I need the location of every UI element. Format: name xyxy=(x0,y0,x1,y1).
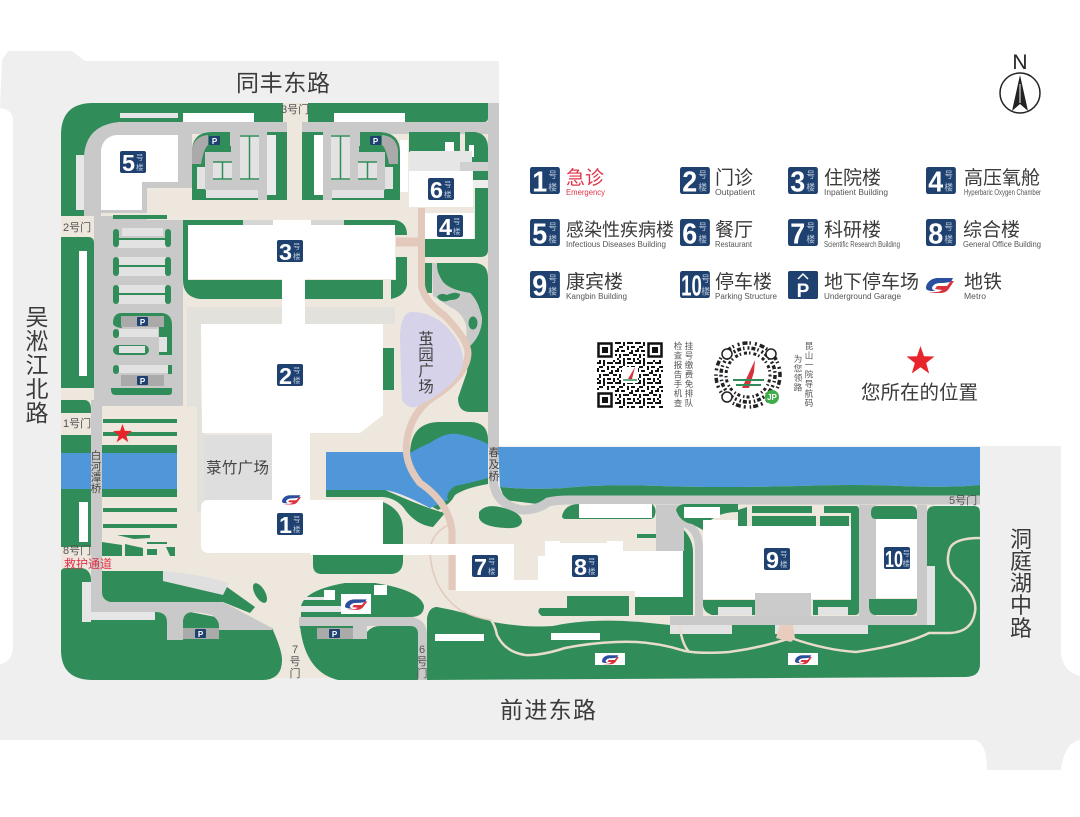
QR caption: 挂号缴费免排队 / 检查报告手机查: 排 xyxy=(685,388,694,398)
building tag 3 xyxy=(277,239,303,265)
legend item 2: 楼 xyxy=(698,181,707,192)
building tag 8: 楼 xyxy=(588,566,596,576)
road name: 洞庭湖中路: 路 xyxy=(1010,616,1032,641)
ambulance route label: 救护通道 xyxy=(64,556,112,571)
legend item 6: 餐厅 xyxy=(715,219,753,241)
legend item 3 xyxy=(788,166,888,198)
mini-program caption: 昆山一院导航码 / 为您领路: 为 xyxy=(794,354,802,364)
green beside emergency building xyxy=(313,348,403,574)
bridge label: 春及桥: 桥 xyxy=(488,470,500,483)
legend item 7: Scientific Research Building xyxy=(824,240,900,249)
mini-program caption: 昆山一院导航码 / 为您领路 xyxy=(794,341,814,408)
building tag 6: 楼 xyxy=(444,189,452,199)
parking tags on the map: P xyxy=(212,137,218,146)
green beside Crescent garden xyxy=(425,263,488,412)
campus base xyxy=(61,103,935,678)
north-east garden xyxy=(400,132,488,257)
legend item 4: 号 xyxy=(944,170,953,180)
legend item 8: 综合楼 xyxy=(963,219,1020,241)
bridge label: 白河潭桥: 潭 xyxy=(91,472,101,484)
building tag 1: 1 xyxy=(279,512,292,538)
parking plaza of general building xyxy=(755,593,811,616)
QR caption: 挂号缴费免排队 / 检查报告手机查: 机 xyxy=(674,388,683,398)
legend item underground garage: 地下停车场 xyxy=(824,271,919,293)
QR caption: 挂号缴费免排队 / 检查报告手机查: 检 xyxy=(674,341,683,351)
mini-program code: JP xyxy=(767,393,778,402)
building tag 9: 楼 xyxy=(780,559,788,569)
legend item 6: 号 xyxy=(698,222,707,232)
legend item metro xyxy=(926,271,1002,301)
south-centre green and access road xyxy=(299,583,427,680)
building tag 1: 号 xyxy=(293,515,300,524)
legend item 1: 号 xyxy=(548,170,557,180)
legend item 8 xyxy=(926,218,1041,250)
buildings xyxy=(101,135,917,599)
building tag 3: 3 xyxy=(279,239,292,265)
legend item 4: Hyperbaric Oxygen Chamber xyxy=(964,188,1041,197)
legend item 9 xyxy=(530,270,627,302)
legend item 6 xyxy=(680,218,753,250)
plaza: 菉竹广场 xyxy=(204,435,272,500)
legend item 6: Restaurant xyxy=(715,240,753,249)
legend item 5 xyxy=(530,218,674,250)
gate labels: 7 xyxy=(292,644,298,656)
north arrow xyxy=(1000,51,1040,113)
building tag 3: 楼 xyxy=(293,251,301,261)
legend item 3: 号 xyxy=(806,170,815,180)
salmon footpath xyxy=(396,208,491,620)
QR caption: 挂号缴费免排队 / 检查报告手机查: 费 xyxy=(685,370,694,380)
gate labels: 1号门 xyxy=(63,416,91,430)
legend item 2: 号 xyxy=(698,170,707,180)
legend item 1: 急诊 xyxy=(566,167,604,189)
bridge label: 白河潭桥: 桥 xyxy=(91,483,102,495)
building tag 4: 号 xyxy=(453,217,460,226)
south-west green and access road xyxy=(61,565,282,680)
QR caption: 挂号缴费免排队 / 检查报告手机查: 查 xyxy=(674,350,683,360)
QR caption: 挂号缴费免排队 / 检查报告手机查: 报 xyxy=(674,360,683,370)
mini-program caption: 昆山一院导航码 / 为您领路: 院 xyxy=(805,370,814,380)
gate labels: 门 xyxy=(416,666,428,680)
light lanes and white strips xyxy=(76,113,405,542)
legend item 4: 楼 xyxy=(944,181,953,192)
east road network xyxy=(479,445,980,625)
road name: 洞庭湖中路: 洞 xyxy=(1010,527,1032,552)
building tag 5: 5 xyxy=(122,150,135,176)
gate labels: 6 xyxy=(419,644,425,656)
plaza: 茧园广场: 园 xyxy=(418,347,434,364)
legend item 3: 3 xyxy=(790,166,805,198)
bridge label: 春及桥: 及 xyxy=(488,459,500,471)
legend item 5: 感染性疾病楼 xyxy=(566,220,674,240)
building tag 2 xyxy=(277,363,303,389)
legend item 1: 楼 xyxy=(548,181,557,192)
you-are-here legend: 您所在的位置 xyxy=(861,382,978,404)
building tag 2: 2 xyxy=(279,363,292,389)
building tag 4: 楼 xyxy=(453,226,461,236)
green: north and west edge xyxy=(61,103,488,547)
plaza: 菉竹广场: 菉竹广场 xyxy=(206,459,269,477)
building tag 8 xyxy=(572,554,598,580)
building tag 5 xyxy=(120,150,146,176)
legend item 9: Kangbin Building xyxy=(566,292,627,301)
QR caption: 挂号缴费免排队 / 检查报告手机查: 号 xyxy=(685,350,693,360)
legend item 5: 楼 xyxy=(548,233,557,244)
bridge label: 白河潭桥: 河 xyxy=(91,461,102,473)
north arrow: N xyxy=(1012,51,1028,74)
metro sign south centre xyxy=(341,594,371,614)
metro sign south belt right xyxy=(788,653,818,665)
metro sign south belt left xyxy=(595,653,625,665)
east light parking lots xyxy=(718,607,848,615)
gate labels: 号 xyxy=(290,655,300,668)
legend item 7: 科研楼 xyxy=(824,219,881,241)
legend item 5: 5 xyxy=(532,218,547,250)
legend item 6: 6 xyxy=(682,218,697,250)
river and pond xyxy=(61,422,980,527)
plaza: 茧园广场 xyxy=(400,312,463,407)
beige promenade xyxy=(147,103,420,409)
building tag 6: 6 xyxy=(430,177,443,203)
road name: 吴淞江北路: 路 xyxy=(26,400,48,426)
parking cluster north-west xyxy=(192,132,287,200)
legend item 3: Inpatient Building xyxy=(824,188,888,197)
you-are-here star on map xyxy=(113,424,132,442)
legend item 2 xyxy=(680,166,756,198)
metro sign at building 1 xyxy=(282,495,301,505)
legend item 6: 楼 xyxy=(698,233,707,244)
legend item 4: 4 xyxy=(928,166,944,198)
QR caption: 挂号缴费免排队 / 检查报告手机查: 缴 xyxy=(685,360,694,370)
legend item 4 xyxy=(926,166,1041,198)
legend item 10: 楼 xyxy=(701,285,710,296)
QR caption: 挂号缴费免排队 / 检查报告手机查: 队 xyxy=(685,398,694,408)
mini-program code xyxy=(716,343,780,407)
road name: 洞庭湖中路: 湖 xyxy=(1010,571,1032,596)
building tag 7 xyxy=(472,554,498,580)
QR caption: 挂号缴费免排队 / 检查报告手机查: 免 xyxy=(685,379,694,389)
legend item 8: General Office Building xyxy=(963,240,1041,249)
building tag 10: 10 xyxy=(885,546,903,572)
mini-program caption: 昆山一院导航码 / 为您领路: 航 xyxy=(805,388,814,398)
mini-program caption: 昆山一院导航码 / 为您领路: 昆 xyxy=(805,341,814,351)
legend item 9: 楼 xyxy=(548,285,557,296)
mini-program caption: 昆山一院导航码 / 为您领路: 领 xyxy=(794,373,803,383)
legend item metro: 地铁 xyxy=(964,271,1002,293)
mini-program caption: 昆山一院导航码 / 为您领路: 码 xyxy=(805,398,813,408)
you-are-here legend xyxy=(861,346,978,404)
road name: 洞庭湖中路: 庭 xyxy=(1010,549,1032,574)
building tag 6: 号 xyxy=(444,180,452,189)
building tag 5: 号 xyxy=(136,153,144,162)
legend item 7: 号 xyxy=(806,222,815,232)
legend item 2: 门诊 xyxy=(715,167,753,189)
gate labels xyxy=(63,102,977,680)
legend item 9: 9 xyxy=(532,270,547,302)
legend item 2: 2 xyxy=(682,166,697,198)
legend item 8: 楼 xyxy=(944,233,953,244)
mini-program caption: 昆山一院导航码 / 为您领路: 山 xyxy=(805,350,813,360)
road name: 同丰东路: 同丰东路 xyxy=(236,70,330,96)
building tag 4 xyxy=(437,214,463,240)
legend item 10: 停车楼 xyxy=(715,271,772,293)
parking tags on the map: P xyxy=(198,630,204,639)
road name: 吴淞江北路: 江 xyxy=(26,352,48,378)
legend item 3: 住院楼 xyxy=(824,167,881,189)
building tag 7: 7 xyxy=(474,554,487,580)
plaza: 茧园广场: 茧 xyxy=(418,330,434,348)
parking tags on the map: P xyxy=(332,630,338,639)
mini-program caption: 昆山一院导航码 / 为您领路: 一 xyxy=(805,360,814,370)
QR caption: 挂号缴费免排队 / 检查报告手机查 xyxy=(674,341,694,408)
legend item 3: 楼 xyxy=(806,181,815,192)
gate labels: 3号门 xyxy=(281,102,309,116)
bridge label: 春及桥: 春 xyxy=(488,446,500,459)
building tag 7: 楼 xyxy=(488,566,496,576)
gate labels: 5号门 xyxy=(949,493,977,507)
legend xyxy=(530,166,1041,302)
building tag 9 xyxy=(764,547,790,573)
bridge label: 白河潭桥: 白 xyxy=(91,449,101,462)
road name: 吴淞江北路: 吴 xyxy=(26,304,48,330)
mini-program caption: 昆山一院导航码 / 为您领路: 您 xyxy=(794,364,803,374)
legend item underground garage: Underground Garage xyxy=(824,292,902,301)
legend item 2: Outpatient xyxy=(715,188,756,197)
legend item 1: 1 xyxy=(532,166,547,198)
building tag 10: 号 xyxy=(902,549,910,558)
road name: 吴淞江北路: 淞 xyxy=(26,328,48,354)
building tag 1 xyxy=(277,512,303,538)
legend item 9: 康宾楼 xyxy=(566,271,623,293)
east greens xyxy=(538,504,917,616)
legend item 7 xyxy=(788,218,900,250)
legend item 1: Emergency xyxy=(566,188,605,197)
parking tags on the map: P xyxy=(373,137,379,146)
parking tags on the map xyxy=(137,136,381,639)
QR caption: 挂号缴费免排队 / 检查报告手机查: 查 xyxy=(674,398,683,408)
building tag 10: 楼 xyxy=(902,558,910,568)
gate labels: 8号门 xyxy=(63,543,91,557)
building tag 4: 4 xyxy=(439,214,452,240)
road name: 吴淞江北路: 北 xyxy=(26,376,48,402)
legend item 5: Infectious Diseases Building xyxy=(566,240,666,249)
legend item 10: 号 xyxy=(701,274,710,284)
parking tags on the map: P xyxy=(140,318,146,327)
gate labels: 门 xyxy=(290,666,300,680)
gate labels: 2号门 xyxy=(63,220,91,234)
legend item underground garage xyxy=(788,271,919,302)
legend item underground garage: P xyxy=(797,281,810,302)
legend item 1 xyxy=(530,166,605,198)
legend item 7: 7 xyxy=(790,218,805,250)
inpatient green surround xyxy=(183,220,407,299)
building tag 8: 号 xyxy=(588,557,596,566)
legend item 10 xyxy=(680,270,778,302)
building tag 6 xyxy=(428,177,454,203)
mini-program caption: 昆山一院导航码 / 为您领路: 导 xyxy=(805,379,814,389)
QR caption: 挂号缴费免排队 / 检查报告手机查: 告 xyxy=(674,370,682,380)
QR caption: 挂号缴费免排队 / 检查报告手机查: 手 xyxy=(674,379,683,389)
QR code: patient services xyxy=(597,342,663,408)
building tag 7: 号 xyxy=(488,557,496,566)
plaza: 茧园广场: 场 xyxy=(418,378,434,396)
parking cluster north-east xyxy=(302,132,400,200)
plaza: 茧园广场: 广 xyxy=(418,362,434,380)
road name: 前进东路: 前进东路 xyxy=(500,697,596,723)
building tag 3: 号 xyxy=(293,242,300,251)
QR caption: 挂号缴费免排队 / 检查报告手机查: 挂 xyxy=(685,341,694,351)
building tag 1: 楼 xyxy=(293,524,301,534)
legend item 10: 10 xyxy=(681,270,702,302)
west parking rows xyxy=(111,215,172,395)
legend item 5: 号 xyxy=(548,222,557,232)
building tag 2: 号 xyxy=(293,366,300,375)
legend item 10: Parking Structure xyxy=(715,292,778,301)
legend item metro: Metro xyxy=(964,292,987,301)
legend item 8: 8 xyxy=(928,218,943,250)
mini-program caption: 昆山一院导航码 / 为您领路: 路 xyxy=(794,382,803,392)
parking tags on the map: P xyxy=(140,377,146,386)
building tag 8: 8 xyxy=(574,554,587,580)
gate labels: 号 xyxy=(416,655,428,668)
legend item 4: 高压氧舱 xyxy=(964,167,1040,189)
west plaza xyxy=(61,407,197,570)
light forecourt band xyxy=(187,307,395,512)
south-east green belt xyxy=(427,506,980,680)
building tag 9: 号 xyxy=(780,550,788,559)
legend item 7: 楼 xyxy=(806,233,815,244)
building tag 5: 楼 xyxy=(136,162,144,172)
building tag 2: 楼 xyxy=(293,375,301,385)
legend item 8: 号 xyxy=(944,222,953,232)
internal roads: north-west xyxy=(84,122,488,605)
building tag 9: 9 xyxy=(766,547,779,573)
road name: 洞庭湖中路: 中 xyxy=(1010,593,1032,618)
legend item 9: 号 xyxy=(548,274,557,284)
